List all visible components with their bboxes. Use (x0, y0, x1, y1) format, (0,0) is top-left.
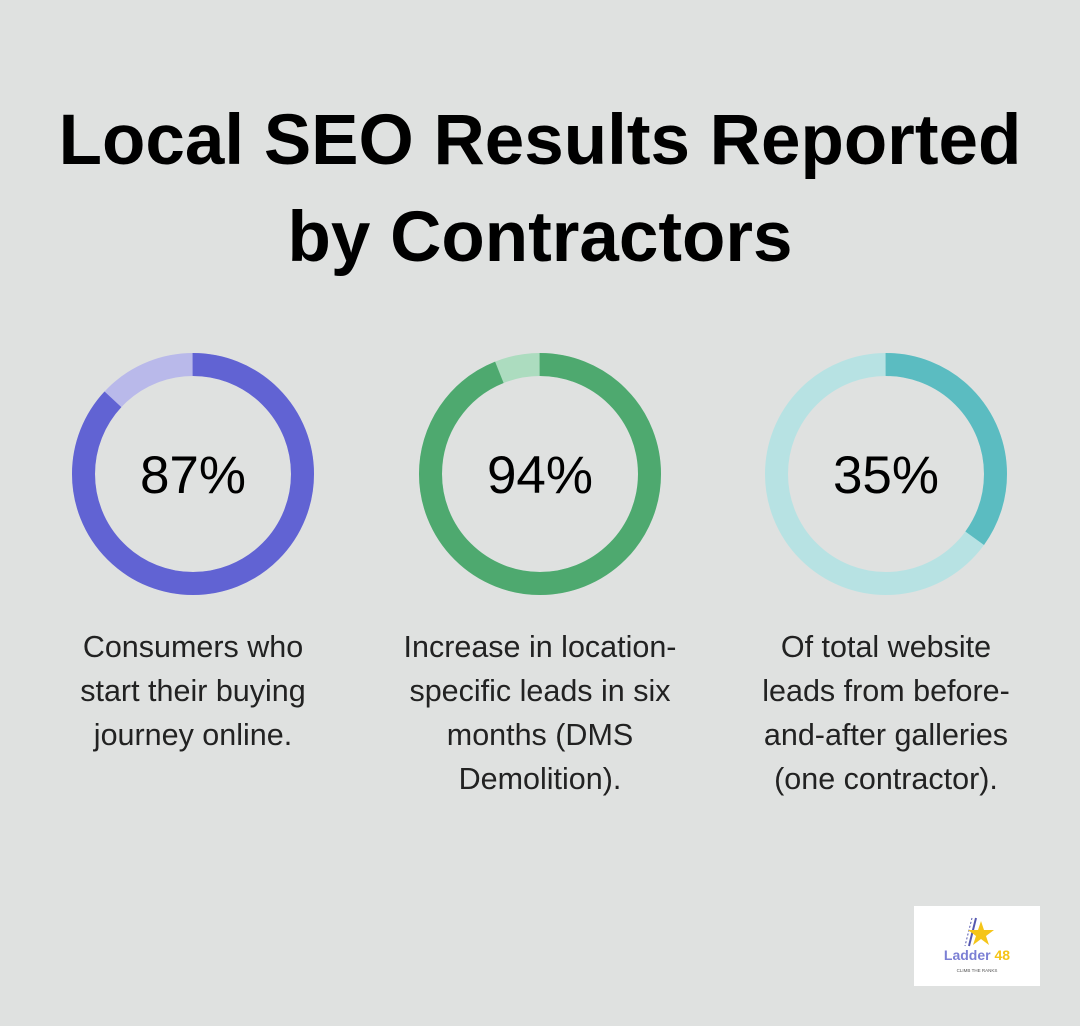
caption 3: Of total website (781, 630, 991, 664)
donut: 87%: 87% (140, 446, 246, 505)
caption 3: and-after galleries (764, 718, 1008, 752)
donut: 94% (430, 364, 650, 584)
donut: 35%: 35% (833, 446, 939, 505)
caption 1: journey online. (94, 718, 292, 752)
donut: 35% (776, 364, 996, 584)
caption 2: months (DMS (447, 718, 633, 752)
caption 2: specific leads in six (409, 674, 671, 708)
logo: CLIMB THE RANKS (957, 968, 997, 973)
donut: 94%: 94% (487, 446, 593, 505)
title: by Contractors (288, 198, 792, 277)
caption 2: Increase in location- (404, 630, 676, 664)
caption 3 (762, 630, 1010, 796)
caption 2: Demolition). (459, 762, 621, 796)
logo: Ladder 48 (944, 947, 1010, 963)
caption 2 (404, 630, 676, 796)
donut: 87% (84, 364, 302, 584)
logo (914, 906, 1040, 986)
caption 1: start their buying (80, 674, 306, 708)
icon: ladder and star (965, 918, 994, 946)
caption 1: Consumers who (83, 630, 303, 664)
title: Local SEO Results Reported (59, 101, 1021, 180)
caption 3: (one contractor). (774, 762, 998, 796)
caption 1 (80, 630, 306, 752)
title (59, 101, 1021, 277)
caption 3: leads from before- (762, 674, 1010, 708)
